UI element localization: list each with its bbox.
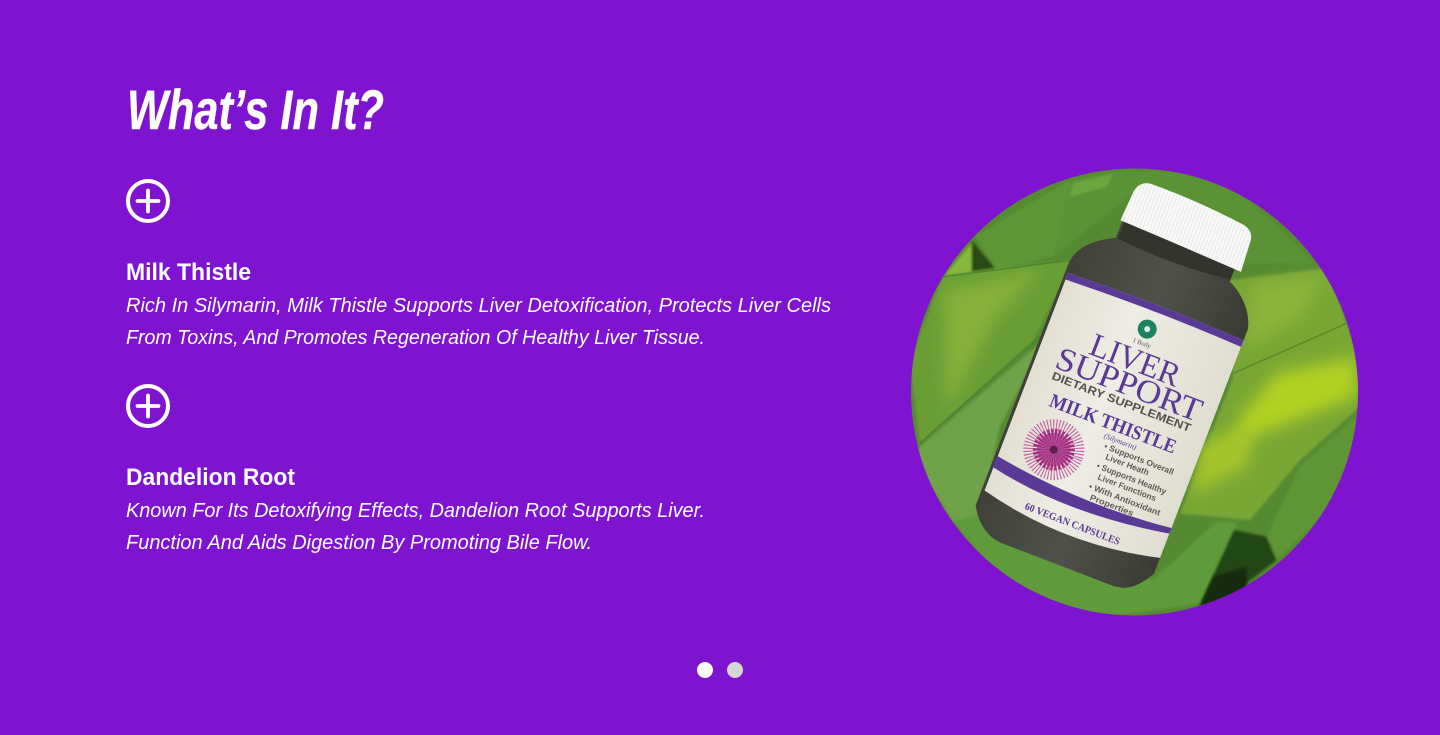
label capacity: 60 VEGAN CAPSULES	[1023, 501, 1121, 548]
ingredient: Milk Thistle	[126, 259, 831, 349]
label bullets: • Supports Healthy	[1095, 461, 1168, 496]
label	[980, 271, 1244, 569]
label top band	[1066, 271, 1244, 347]
carousel dot active	[697, 662, 713, 678]
description: Milk Thistle: Rich In Silymarin, Milk Thistle Supports Liver Detoxification, Protects Liver Cells	[126, 295, 831, 317]
label bullets: Properties	[1089, 492, 1135, 518]
brand logo: 1 Body	[1132, 337, 1152, 351]
icon: plus circle 2	[128, 386, 168, 426]
leaves	[900, 160, 1370, 625]
label ingredient: MILK THISTLE	[1046, 390, 1179, 458]
label bullets: • With Antioxidant	[1087, 481, 1162, 518]
bottle: SUPPORT	[1051, 341, 1207, 430]
label subtitle: DIETARY SUPPLEMENT	[1050, 371, 1192, 435]
title: What’s In It?	[127, 78, 384, 141]
bottle body	[976, 221, 1248, 588]
icon: plus circle 1	[128, 181, 168, 221]
heading: Dandelion Root: Dandelion Root	[126, 464, 295, 491]
description: Milk Thistle: From Toxins, And Promotes Regeneration Of Healthy Liver Tissue.	[126, 327, 705, 349]
description: Dandelion Root: Known For Its Detoxifying Effects, Dandelion Root Supports Liver.	[126, 500, 705, 522]
label flower	[1023, 419, 1085, 481]
carousel dot inactive	[727, 662, 743, 678]
label bullets: Liver Heath	[1104, 452, 1151, 477]
label bullets: Liver Functions	[1096, 472, 1158, 503]
bottle cap	[1120, 183, 1252, 272]
description: Dandelion Root	[126, 500, 705, 554]
bottle: (Silymarin)	[1103, 431, 1138, 452]
ingredient: Dandelion Root	[126, 464, 705, 554]
label title: LIVER	[1085, 327, 1185, 394]
label bullets: • Supports Overall	[1103, 441, 1176, 477]
bottle	[976, 183, 1252, 588]
label bullets	[1089, 445, 1174, 516]
heading: Milk Thistle: Milk Thistle	[126, 259, 251, 286]
bottle neck	[1117, 222, 1236, 284]
brand logo	[1132, 320, 1157, 349]
product photo: bottle on leaves	[900, 160, 1370, 625]
description: Milk Thistle	[126, 295, 831, 349]
label swoosh	[992, 456, 1172, 534]
description: Dandelion Root: Function And Aids Digestion By Promoting Bile Flow.	[126, 532, 592, 554]
